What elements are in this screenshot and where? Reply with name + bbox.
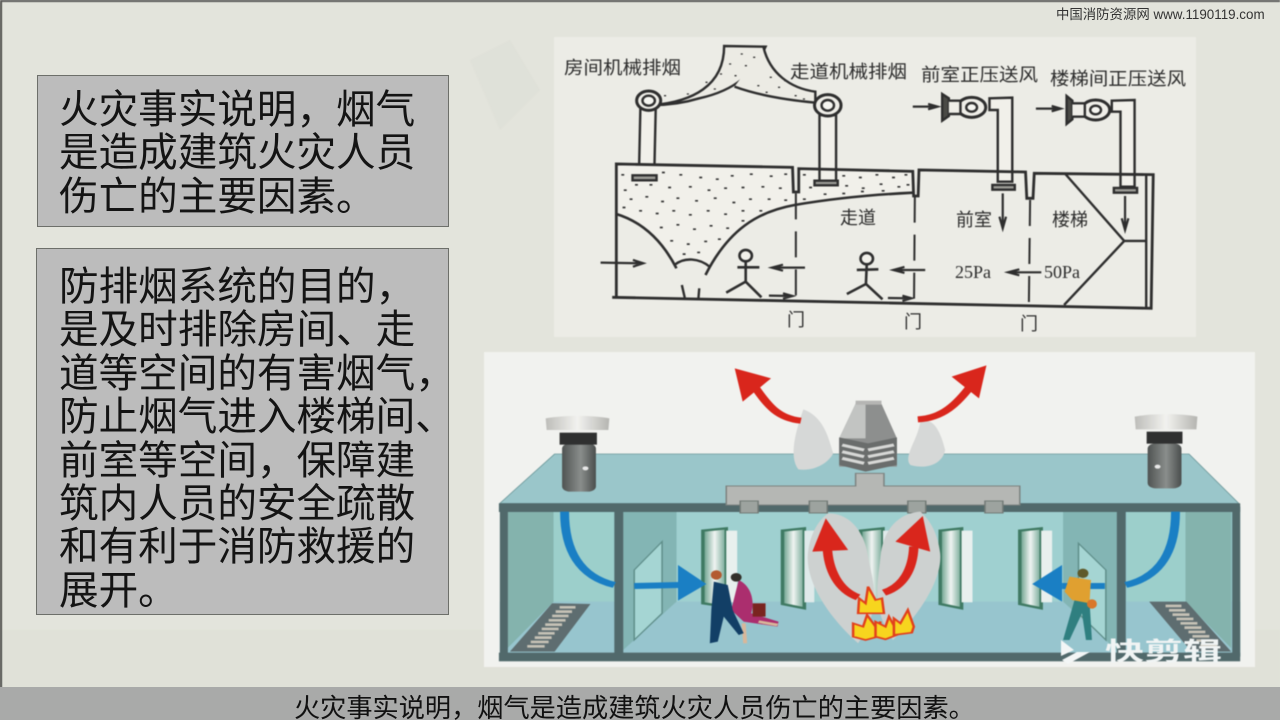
supply fans <box>989 98 1012 182</box>
text box: purpose of smoke control system: 防止烟气进入楼梯间、 <box>59 385 455 442</box>
figures <box>726 250 883 299</box>
text box: purpose of smoke control system: 筑内人员的安全疏散 <box>59 472 415 529</box>
labels: zones and pressures: 门 <box>787 310 805 330</box>
subtitle bar <box>0 687 1280 720</box>
text box: fire facts: 伤亡的主要因素。 <box>59 165 376 222</box>
text box: purpose of smoke control system: 道等空间的有害烟气， <box>59 342 455 399</box>
smoke at roof exhaust <box>794 409 833 470</box>
source label: 中国消防资源网 www.1190119.com <box>1056 7 1265 22</box>
room doors <box>703 528 1052 608</box>
structure frame <box>499 503 1240 661</box>
text box: purpose of smoke control system: 展开。 <box>59 559 178 616</box>
running people <box>710 570 778 643</box>
text box: fire facts <box>37 75 449 227</box>
labels: zones and pressures: 楼梯 <box>1052 210 1088 230</box>
text box: purpose of smoke control system: 是及时排除房间、走 <box>59 298 415 355</box>
interior back wall <box>500 507 1240 657</box>
text box: purpose of smoke control system: 前室等空间，保障建 <box>59 429 415 486</box>
illustration: building smoke exhaust and pressurization <box>484 352 1255 667</box>
labels: system names: 前室正压送风 <box>921 65 1038 85</box>
fire <box>853 587 914 640</box>
smoke layer boundary <box>705 193 913 275</box>
red arrows: exhaust outdoors <box>755 385 972 421</box>
arrows <box>601 104 1128 301</box>
labels: system names <box>564 58 1186 89</box>
labels: zones and pressures: 门 <box>904 312 922 332</box>
roof <box>500 454 1239 503</box>
smoke dots <box>621 53 909 255</box>
exhaust ducts <box>639 108 656 165</box>
text box: purpose of smoke control system: 防排烟系统的目的， <box>59 255 415 312</box>
labels: zones and pressures <box>787 208 1088 334</box>
duct <box>726 473 1020 505</box>
left roof fan <box>546 416 609 492</box>
stair partitions <box>1064 174 1147 305</box>
stair rooms <box>507 512 554 648</box>
text box: purpose of smoke control system: 和有利于消防救援的 <box>59 515 415 572</box>
red arrows: smoke flow indoors <box>827 547 914 597</box>
right roof fan <box>1135 414 1197 488</box>
building outline <box>612 164 1153 308</box>
text box: fire facts: 是造成建筑火灾人员 <box>59 121 415 178</box>
floor <box>500 602 1240 657</box>
diagram: smoke control section drawing <box>554 37 1196 337</box>
text box: purpose of smoke control system <box>36 248 449 615</box>
central roof fan <box>839 402 897 467</box>
watermark logo: 快剪辑: 快剪辑 <box>1105 632 1222 668</box>
watermark logo: 快剪辑 <box>1061 632 1222 668</box>
labels: system names: 走道机械排烟 <box>790 62 907 82</box>
labels: zones and pressures: 走道 <box>840 208 876 228</box>
text box: fire facts: 火灾事实说明，烟气 <box>59 78 415 135</box>
smoke in corridor <box>808 513 874 643</box>
labels: zones and pressures: 门 <box>1020 314 1038 334</box>
labels: zones and pressures: 25Pa <box>955 262 991 282</box>
smoke fill in room and corridor <box>616 164 913 267</box>
labels: zones and pressures: 50Pa <box>1044 262 1080 282</box>
blue arrows: pressurized air <box>565 512 1176 586</box>
floor vents <box>510 603 590 652</box>
door lines <box>796 193 1030 305</box>
corridor doors open <box>634 542 662 640</box>
labels: system names: 房间机械排烟 <box>564 58 681 78</box>
labels: zones and pressures: 前室 <box>956 210 992 230</box>
labels: system names: 楼梯间正压送风 <box>1050 69 1186 89</box>
